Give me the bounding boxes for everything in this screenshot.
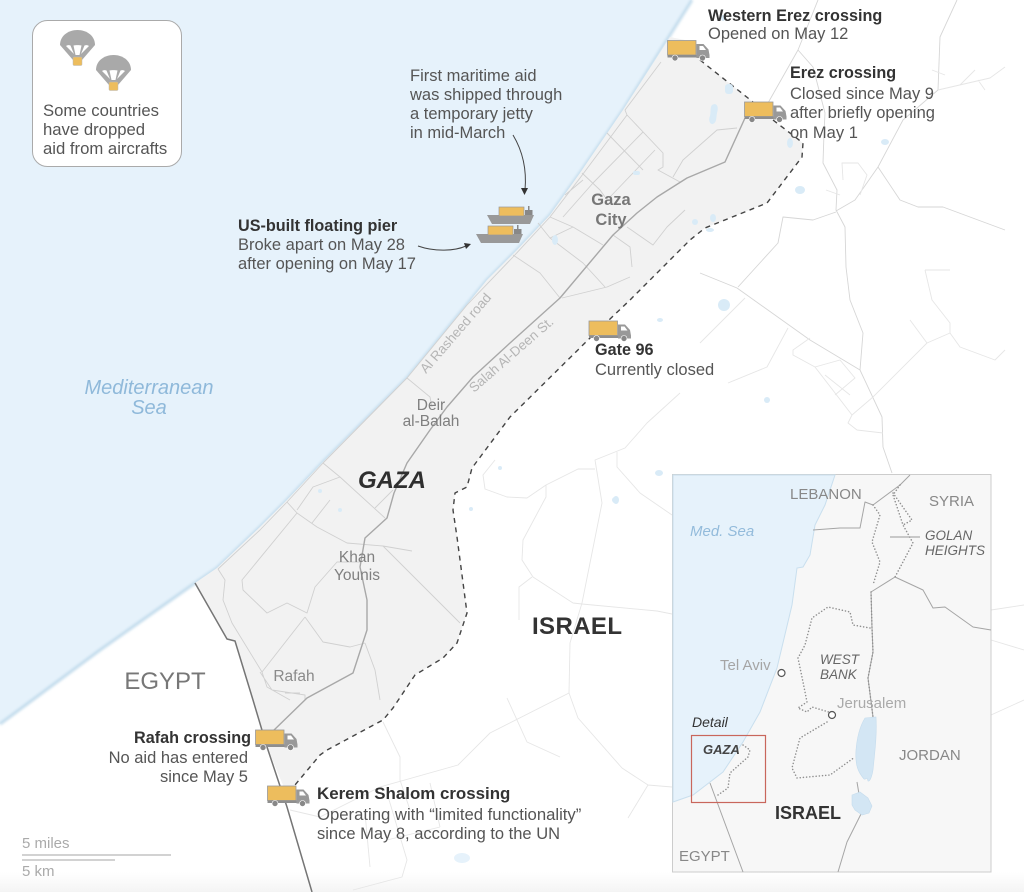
- inset sea: [673, 475, 835, 802]
- icon: truck Gate 96: [589, 321, 631, 342]
- callout: Western Erez crossing: Opened on May 12: [708, 25, 848, 43]
- label: Deir al-Balah: [403, 397, 459, 430]
- callout: Erez crossing: [790, 64, 935, 142]
- Salah Al-Deen main road: [272, 118, 745, 732]
- inset labels: Tel Aviv: [720, 657, 771, 674]
- sea: [0, 0, 692, 724]
- callout: Rafah crossing: [109, 729, 251, 786]
- scale bar: [22, 835, 171, 880]
- icon: truck Rafah: [256, 730, 298, 750]
- legend text: aid from aircrafts: [43, 139, 167, 158]
- callout: Rafah crossing: No aid has entered: [109, 749, 248, 767]
- label: EGYPT: EGYPT: [124, 668, 206, 695]
- inset labels: Jerusalem: [837, 695, 906, 712]
- inset labels: Med. Sea: [690, 523, 754, 540]
- Gaza eastern border: [295, 60, 803, 785]
- Tel Aviv marker: [778, 670, 785, 676]
- Egypt border: [195, 583, 312, 892]
- callout: Erez crossing: on May 1: [790, 124, 858, 142]
- label: Gaza City: City: [595, 211, 627, 229]
- Gaza territory: [195, 37, 803, 790]
- inset labels: ISRAEL: [775, 803, 841, 823]
- callout: Kerem Shalom crossing: [317, 784, 581, 843]
- callout: Gate 96: [595, 341, 714, 379]
- icon: truck Kerem Shalom: [268, 786, 310, 806]
- callout: Gate 96: Gate 96: [595, 341, 654, 359]
- inset Dead Sea and Lake: [852, 717, 876, 815]
- label: GAZA: GAZA: [358, 467, 426, 494]
- callout: US-built floating pier: after opening on May 17: [238, 255, 416, 273]
- label: Gaza City: Gaza: [591, 191, 632, 209]
- far roads in Israel: [290, 0, 1024, 890]
- inset dotted boundaries: [718, 485, 913, 795]
- callout: Kerem Shalom crossing: since May 8, according to the UN: [317, 825, 560, 843]
- label: Khan Younis: Khan: [339, 549, 375, 566]
- callout: maritime aid: First maritime aid: [410, 67, 537, 85]
- detail rectangle: [692, 736, 766, 802]
- label: Khan Younis: Younis: [334, 567, 380, 584]
- inset labels: [679, 486, 985, 865]
- label: Mediterranean Sea: Mediterranean: [85, 377, 213, 399]
- scale bar: 5 miles: [22, 835, 70, 852]
- callout: Erez crossing: Closed since May 9: [790, 85, 934, 103]
- road label: Salah Al-Deen St.: Salah Al-Deen St.: [466, 314, 556, 395]
- label: Deir al-Balah: Deir: [417, 397, 445, 414]
- icon: truck Western Erez: [668, 40, 710, 61]
- coast edge: [0, 0, 692, 724]
- arrow: maritime to ships: [513, 135, 528, 195]
- label: Khan Younis: [334, 549, 380, 584]
- Gaza minor roads: [218, 62, 737, 700]
- inset labels: JORDAN: [899, 747, 961, 764]
- callout: Western Erez crossing: [708, 7, 882, 43]
- callout: Rafah crossing: since May 5: [160, 768, 248, 786]
- panel: locator inset map: [672, 474, 991, 872]
- icon: ship lower: [476, 225, 523, 243]
- inset labels: EGYPT: [679, 848, 730, 865]
- label: ISRAEL: ISRAEL: [532, 613, 622, 640]
- callout: maritime aid: in mid-March: [410, 124, 505, 142]
- icon: ship upper: [487, 206, 534, 224]
- callout: Erez crossing: after briefly opening: [790, 104, 935, 122]
- legend text: have dropped: [43, 120, 145, 139]
- inset labels: HEIGHTS: [925, 543, 985, 558]
- legend text: Some countries: [43, 101, 159, 120]
- callout: Erez crossing: Erez crossing: [790, 64, 896, 82]
- callout: maritime aid: was shipped through: [409, 86, 562, 104]
- label: Mediterranean Sea: [85, 377, 213, 419]
- inset labels: GOLAN: [925, 528, 973, 543]
- callout: Kerem Shalom crossing: Operating with “limited functionality”: [317, 805, 581, 824]
- arrow: pier: [418, 243, 471, 250]
- callout: maritime aid: a temporary jetty: [410, 105, 534, 123]
- callout: maritime aid: [409, 67, 562, 142]
- callout: US-built floating pier: US-built floating pier: [238, 217, 398, 235]
- label: Rafah: Rafah: [273, 668, 315, 685]
- callout: Western Erez crossing: Western Erez crossing: [708, 7, 882, 25]
- scale bar: 5 km: [22, 863, 55, 880]
- water bodies: [318, 15, 889, 863]
- inset labels: LEBANON: [790, 486, 862, 503]
- Jerusalem marker: [828, 712, 836, 718]
- bottom fade: [0, 872, 1024, 892]
- inset labels: BANK: [820, 667, 858, 682]
- inset labels: GAZA: [703, 742, 740, 757]
- Golan label line: [890, 536, 920, 538]
- callout: Gate 96: Currently closed: [595, 361, 714, 379]
- icon: parachute 2: [96, 55, 131, 90]
- inset labels: WEST: [820, 652, 861, 667]
- legend text: [43, 101, 167, 158]
- callout: Kerem Shalom crossing: Kerem Shalom crossing: [317, 784, 510, 803]
- label: Mediterranean Sea: Sea: [131, 397, 167, 419]
- inset labels: Detail: [692, 714, 729, 730]
- callout: Rafah crossing: Rafah crossing: [134, 729, 251, 747]
- label: Gaza City: [591, 191, 632, 229]
- inset labels: SYRIA: [929, 493, 974, 510]
- panel: airdrop legend: [32, 20, 182, 166]
- inset borders: [710, 475, 991, 872]
- road label: Al Rasheed road: Al Rasheed road: [417, 290, 494, 376]
- label: Deir al-Balah: al-Balah: [403, 413, 459, 430]
- callout: US-built floating pier: [238, 217, 416, 273]
- icon: parachute 1: [60, 30, 95, 66]
- icon: truck Erez: [744, 102, 786, 122]
- callout: US-built floating pier: Broke apart on May 28: [238, 236, 405, 254]
